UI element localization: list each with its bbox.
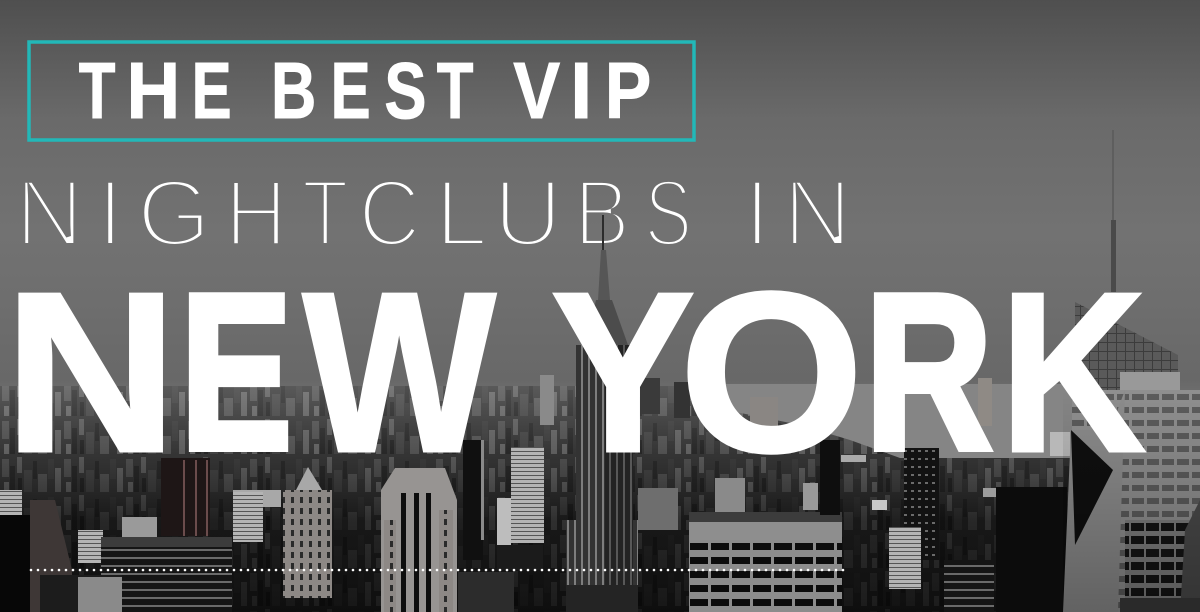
heading: NIGHTCLUBS IN: N	[15, 160, 84, 266]
heading: THE BEST VIP: B	[271, 46, 316, 135]
heading: NEW YORK: R	[865, 248, 992, 496]
heading: THE BEST VIP: T	[79, 46, 115, 135]
river water	[726, 384, 1075, 458]
low block under centre	[458, 572, 514, 612]
heading: NIGHTCLUBS IN: S	[644, 160, 692, 266]
heading: NIGHTCLUBS IN: C	[358, 160, 420, 266]
small block bottom left	[40, 575, 122, 612]
pale tower centre-left	[381, 468, 457, 612]
dark tower centre	[463, 440, 484, 560]
heading: NEW YORK: O	[679, 246, 864, 500]
empire state spire tip showing through the heading	[602, 215, 604, 249]
heading: NIGHTCLUBS IN: T	[302, 160, 348, 266]
distant towers beyond the river	[640, 378, 660, 414]
heading: NIGHTCLUBS IN: B	[574, 160, 630, 266]
pale buildings scattered in the mid city	[0, 478, 1005, 612]
heading: NIGHTCLUBS IN: N	[783, 160, 852, 266]
dark towers centre-right	[820, 440, 939, 589]
heading: THE BEST VIP: T	[437, 46, 473, 135]
heading: NIGHTCLUBS IN: H	[225, 160, 287, 266]
red-brown tower	[161, 458, 210, 536]
heading: THE BEST VIP: S	[384, 46, 426, 135]
pale wide building with window grid	[689, 512, 842, 612]
striped tower left	[233, 492, 263, 542]
heading: NIGHTCLUBS IN: G	[137, 160, 211, 266]
distant city blocks	[0, 386, 1070, 612]
left edge dark tower	[0, 515, 30, 612]
Bank of America Tower	[1063, 130, 1200, 612]
pale tower centre	[497, 447, 544, 570]
heading: NEW YORK: Y	[551, 246, 695, 500]
heading: NEW YORK: W	[303, 246, 496, 500]
heading: THE BEST VIP: H	[126, 46, 180, 135]
dotted divider	[31, 569, 849, 571]
background: city skyline photo	[0, 130, 1200, 612]
heading: THE BEST VIP: I	[570, 46, 592, 135]
teal title box	[29, 42, 694, 140]
heading: THE BEST VIP: P	[605, 46, 651, 135]
dark striped block lower left	[101, 537, 232, 612]
heading: NIGHTCLUBS IN: I	[744, 160, 770, 266]
ornate tower	[283, 467, 332, 598]
heading: NEW YORK: K	[1000, 246, 1146, 500]
heading: THE BEST VIP: V	[513, 46, 560, 135]
heading: NEW YORK: E	[180, 248, 292, 496]
heading: THE BEST VIP: E	[331, 46, 371, 135]
heading: NEW YORK: N	[4, 246, 178, 500]
heading: NIGHTCLUBS IN: I	[97, 160, 123, 266]
heading: NIGHTCLUBS IN: U	[494, 160, 562, 266]
heading: NIGHTCLUBS IN: L	[435, 160, 488, 266]
Empire State Building	[566, 215, 638, 612]
heading: THE BEST VIP: E	[192, 46, 232, 135]
left building pale tower	[30, 500, 72, 612]
black tower right	[996, 487, 1067, 612]
